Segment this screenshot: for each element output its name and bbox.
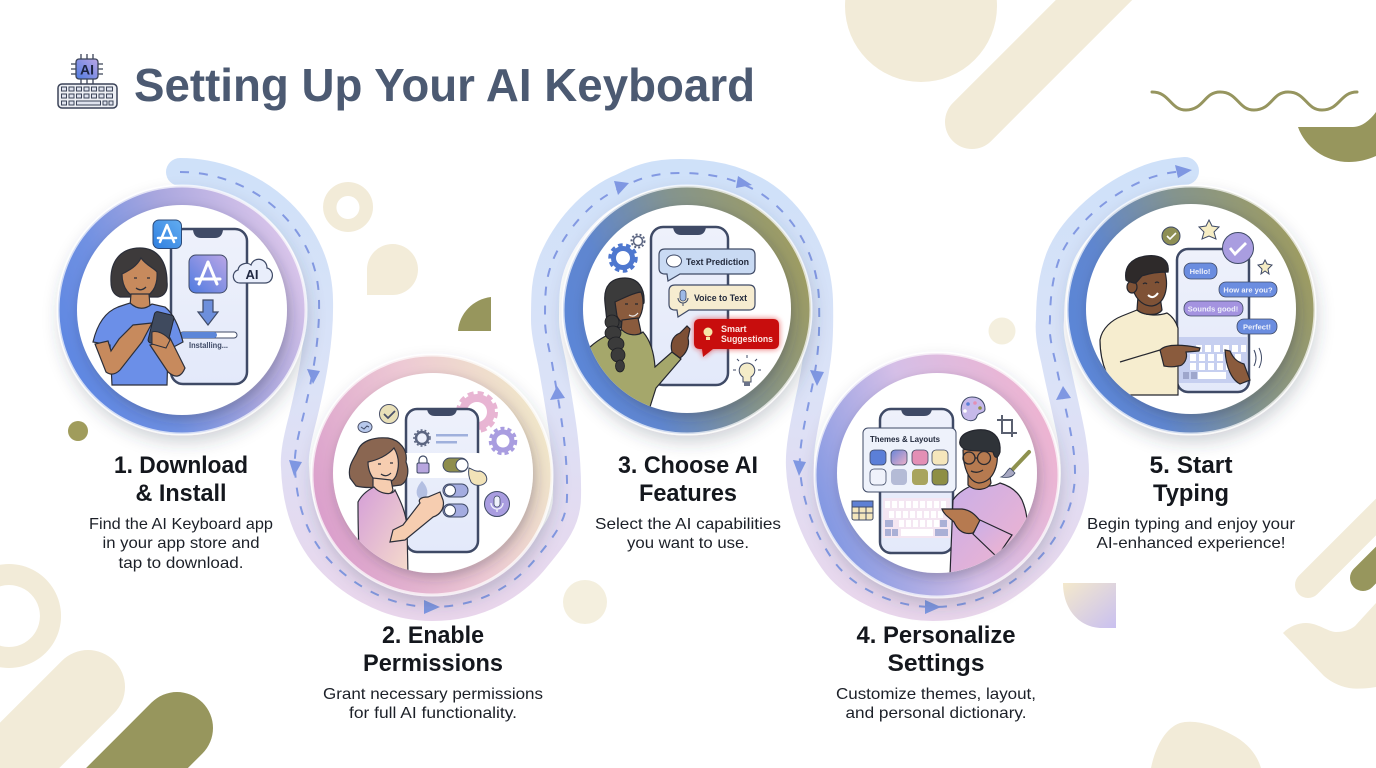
step 4 illustration: man personalizing [880, 409, 1027, 575]
step 1 icons [153, 220, 272, 283]
step 2 text: for full AI functionality. [349, 705, 517, 722]
chat bubbles: Hello! [1190, 267, 1210, 276]
title icon: AI chip above keyboard [58, 54, 117, 108]
gears [610, 234, 644, 271]
step 2 text: 2. Enable [382, 622, 484, 649]
step 2 text [323, 622, 543, 722]
step 4 ring [815, 353, 1059, 597]
chat bubbles: How are you? [1223, 286, 1273, 294]
step 1 text: tap to download. [118, 555, 244, 572]
themes card [863, 428, 956, 492]
phone: Installing... [189, 340, 228, 350]
app store badge [153, 220, 182, 248]
step 3 text: Features [639, 480, 737, 507]
big check badge [1222, 232, 1254, 264]
chat bubbles [1184, 263, 1277, 334]
flow ribbon with dashed path [180, 171, 1185, 607]
chat bubbles: Sounds good! [1188, 304, 1238, 314]
title: Setting Up Your AI Keyboard [134, 59, 755, 111]
step 1 text: & Install [136, 480, 226, 507]
bubble: smart suggestions: Smart [721, 324, 747, 334]
bubble: smart suggestions [694, 319, 779, 357]
face details [378, 463, 393, 476]
small globe [358, 422, 372, 432]
bubble: smart suggestions: Suggestions [721, 334, 773, 344]
step 5 text: AI-enhanced experience! [1096, 535, 1286, 552]
step 2 ring [312, 355, 552, 595]
step 4 theme card and icons [852, 397, 1029, 520]
step 5 text: 5. Start [1150, 452, 1232, 479]
eyes and smile [134, 278, 150, 290]
step 5 illustration: man typing [1100, 249, 1262, 395]
step 3 text: 3. Choose AI [618, 452, 758, 479]
person [93, 248, 185, 385]
step 3 illustration: woman choosing features [590, 227, 728, 410]
permission band [402, 453, 487, 485]
small check badge [1162, 227, 1180, 245]
step 1 text: Find the AI Keyboard app [89, 516, 273, 533]
phone [880, 409, 953, 553]
bubble: voice to text: Voice to Text [694, 293, 748, 304]
chat bubbles: Perfect! [1243, 322, 1271, 332]
step 5 ring [1067, 186, 1315, 434]
person [349, 438, 443, 575]
face details [625, 304, 638, 316]
step 4 text: Customize themes, layout, [836, 686, 1036, 703]
step 4 text: 4. Personalize [856, 622, 1016, 649]
phone [171, 229, 247, 384]
step 1 illustration: woman installing app [93, 229, 247, 385]
AI cloud: AI [246, 267, 258, 282]
person [1100, 256, 1250, 395]
phone [406, 409, 478, 552]
step 5 bubbles and icons [1162, 220, 1277, 334]
step 3 text: Select the AI capabilities [595, 516, 781, 533]
step 5 text: Begin typing and enjoy your [1087, 516, 1296, 533]
step 4 text [836, 622, 1036, 722]
mic badge [484, 492, 510, 516]
crop icon [997, 415, 1017, 437]
tap marks [1254, 348, 1262, 368]
bubble: text prediction: Text Prediction [686, 257, 749, 268]
title icon: AI chip above keyboard: AI [80, 62, 94, 78]
hand on handset [152, 331, 170, 348]
stars [1199, 220, 1272, 274]
flow arrowheads [289, 165, 1192, 614]
step 4 text: and personal dictionary. [846, 705, 1026, 722]
step 5 text [1087, 452, 1296, 552]
paint brush icon [1001, 452, 1029, 478]
step 3 text [595, 452, 781, 552]
step 3 ring [563, 186, 811, 434]
step 4 text: Settings [888, 650, 984, 677]
step 1 ring [58, 186, 306, 434]
phone [1177, 249, 1249, 392]
step 5 text: Typing [1153, 480, 1229, 507]
step 2 illustration: woman enabling permissions [349, 393, 516, 575]
face details [1143, 282, 1159, 297]
palette icon [961, 397, 985, 421]
step 1 text: in your app store and [102, 535, 260, 552]
person [590, 278, 690, 410]
step 1 text: 1. Download [114, 452, 248, 479]
themes card: Themes & Layouts [870, 434, 940, 444]
step 3 text: you want to use. [627, 535, 749, 552]
step 1 text [89, 452, 273, 572]
glasses [963, 452, 990, 472]
handset [147, 311, 175, 347]
step 2 text: Grant necessary permissions [323, 686, 543, 703]
step 2 text: Permissions [363, 650, 503, 677]
light bulb [733, 355, 761, 386]
braid [605, 315, 625, 372]
step 3 bubbles [659, 249, 779, 386]
check badge [380, 404, 398, 424]
gears [458, 393, 516, 454]
step 2 icons [358, 404, 510, 516]
person [942, 430, 1027, 575]
table icon [852, 501, 873, 520]
phone [651, 227, 728, 385]
